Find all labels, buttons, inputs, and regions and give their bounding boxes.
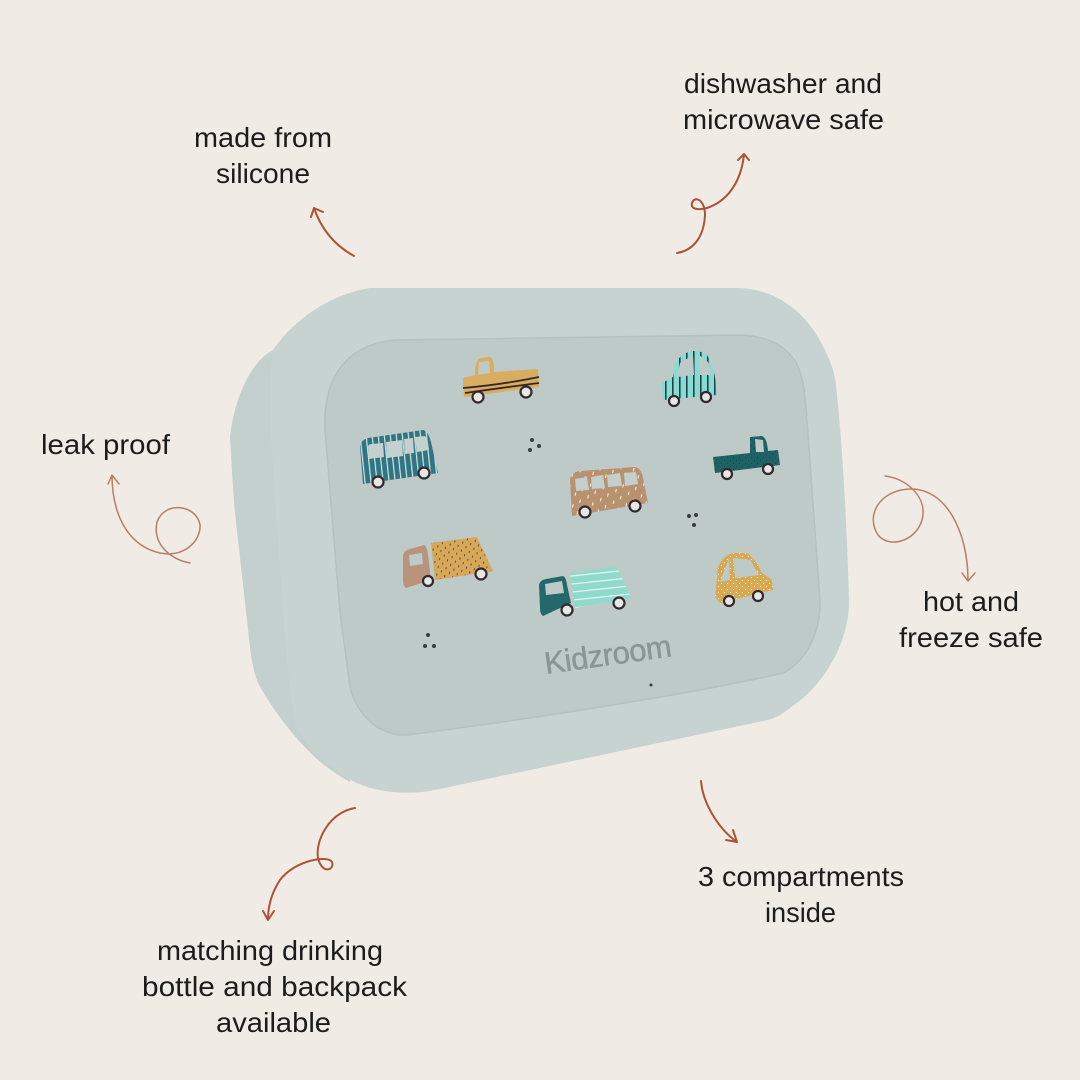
confetti dots (423, 438, 698, 686)
arrow: to matching items (263, 808, 355, 920)
label: made from silicone: silicone (216, 158, 310, 189)
label: 3 compartments inside: 3 compartments (698, 861, 904, 892)
lid inner panel (325, 335, 820, 735)
arrow: to leak proof (108, 475, 200, 563)
vehicle: mustard truck (403, 537, 493, 588)
vehicle: mint striped car (662, 351, 717, 406)
label: hot and freeze safe: freeze safe (899, 622, 1043, 653)
label: matching drinking bottle and backpack available: matching drinking (157, 935, 383, 966)
brand logo: Kidzroom (542, 628, 674, 681)
label: leak proof: leak proof (41, 429, 170, 460)
label: dishwasher and microwave safe (683, 68, 884, 135)
arrow: to 3 compartments (701, 781, 737, 842)
label: 3 compartments inside: inside (765, 897, 836, 928)
label: dishwasher and microwave safe: dishwasher and (684, 68, 882, 99)
vehicle: dark green pickup (713, 436, 780, 479)
vehicle: yellow car (715, 553, 773, 606)
label: dishwasher and microwave safe: microwave safe (683, 104, 884, 135)
label: hot and freeze safe: hot and (923, 586, 1019, 617)
arrow: to made from silicone (311, 208, 354, 256)
label: made from silicone: made from (194, 122, 332, 153)
lunch box product (230, 288, 849, 793)
label: hot and freeze safe (899, 586, 1043, 653)
label: 3 compartments inside (698, 861, 904, 928)
label: made from silicone (194, 122, 332, 189)
label: matching drinking bottle and backpack available: available (216, 1007, 331, 1038)
silicone lid (270, 288, 849, 793)
label: matching drinking bottle and backpack available: bottle and backpack (142, 971, 408, 1002)
arrow: to dishwasher and microwave safe (677, 154, 749, 253)
box base side (230, 350, 350, 782)
label: matching drinking bottle and backpack available (142, 935, 408, 1038)
vehicle: brown bus (570, 467, 648, 518)
vehicle: yellow pickup (463, 357, 539, 402)
vehicle: green and mint truck (539, 567, 631, 616)
vehicle: teal striped bus (360, 430, 438, 488)
arrow: to hot and freeze safe (873, 476, 975, 581)
